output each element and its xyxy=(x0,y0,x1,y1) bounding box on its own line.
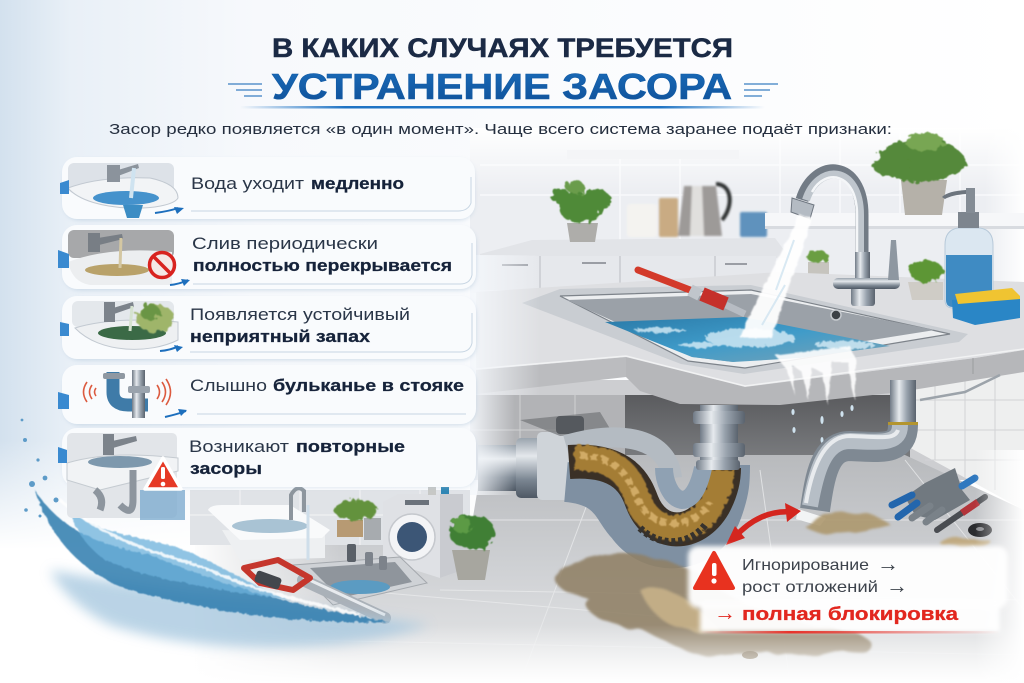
sign 1 text: медленно xyxy=(311,175,404,193)
pipe: left horizontal xyxy=(478,412,612,500)
washing machine xyxy=(383,481,463,578)
sponge xyxy=(952,288,1020,325)
sign 2 text: полностью перекрывается xyxy=(193,257,452,275)
soft fades over scene xyxy=(190,255,1024,683)
right shelf xyxy=(765,213,1024,227)
small sink and wrench xyxy=(244,544,427,618)
jars and kettle xyxy=(627,184,767,237)
scene: under-counter wall and floor xyxy=(190,362,1024,683)
gloves and tools xyxy=(892,468,992,537)
overflow drips xyxy=(775,346,856,405)
callout text: line 1: Игнорирование xyxy=(742,557,869,574)
soap dispenser xyxy=(942,188,993,308)
icon: repeated clogs xyxy=(58,433,185,520)
callout text: line 3: полная блокировка xyxy=(742,603,959,624)
plants xyxy=(334,500,381,540)
sign 5 text xyxy=(189,438,405,478)
arrow glyph: line 2: → xyxy=(886,573,908,598)
back counter xyxy=(480,238,790,262)
heading line 2: УСТРАНЕНИЕ ЗАСОРА xyxy=(272,66,732,107)
callout text: line 2: рост отложений xyxy=(742,579,878,596)
sign 3 text: Появляется устойчивый xyxy=(190,306,410,324)
title xyxy=(228,33,778,108)
sign 5 text: повторные xyxy=(296,438,405,456)
arrow glyph: line 1: → xyxy=(877,551,899,576)
callout: warning xyxy=(688,546,1008,634)
icon: blocked basin xyxy=(58,230,190,286)
tub xyxy=(208,488,330,560)
panel: sign 2 xyxy=(58,225,476,290)
puddle xyxy=(555,513,991,659)
icon: slow draining basin xyxy=(60,163,184,218)
icon: basin with odor xyxy=(60,301,183,352)
pipe: right drain xyxy=(796,375,1000,526)
subtitle: Засор редко появляется «в один момент». Чаще всего система заранее подаёт признаки: xyxy=(109,122,892,138)
sign 5 text: Возникают xyxy=(189,438,290,456)
arrow glyph: line 3: → xyxy=(714,600,736,625)
sign 4 text xyxy=(190,377,464,395)
red double arrow xyxy=(726,503,801,545)
sign 4 text: бульканье в стояке xyxy=(273,377,464,395)
scene: small bathroom bottom left xyxy=(190,481,495,618)
sign 1 text: Вода уходит xyxy=(191,175,305,193)
water stream xyxy=(740,214,812,338)
sign 2 text xyxy=(192,235,452,275)
water wave xyxy=(21,419,430,648)
sign 1 text xyxy=(191,175,404,193)
floor xyxy=(195,455,1024,683)
panel: sign 3 xyxy=(60,296,476,360)
left plant xyxy=(550,180,611,242)
panel: sign 1 xyxy=(60,157,475,220)
scene: kitchen background xyxy=(470,128,1024,293)
red tool in sink xyxy=(638,270,745,314)
heading line 1: В КАКИХ СЛУЧАЯХ ТРЕБУЕТСЯ xyxy=(272,33,733,63)
icon: gurgling pipe xyxy=(58,370,187,418)
panel: sign 4 xyxy=(58,365,476,425)
scene: countertop xyxy=(476,272,1024,405)
plant in pot xyxy=(449,515,495,580)
sink with water xyxy=(522,285,968,443)
panel: sign 5 xyxy=(58,428,476,520)
sign 3 text: неприятный запах xyxy=(190,328,371,346)
small planter xyxy=(908,260,943,300)
faucet xyxy=(740,171,900,338)
sign 4 text: Слышно xyxy=(190,377,267,395)
sign 5 text: засоры xyxy=(190,460,262,478)
sign 2 text: Слив периодически xyxy=(192,235,378,253)
sign 3 text xyxy=(190,306,410,346)
small pot xyxy=(807,251,829,280)
top right plant xyxy=(873,133,966,215)
icon: warning triangle xyxy=(695,553,733,588)
pipe: cutaway p-trap with clog xyxy=(566,405,745,548)
